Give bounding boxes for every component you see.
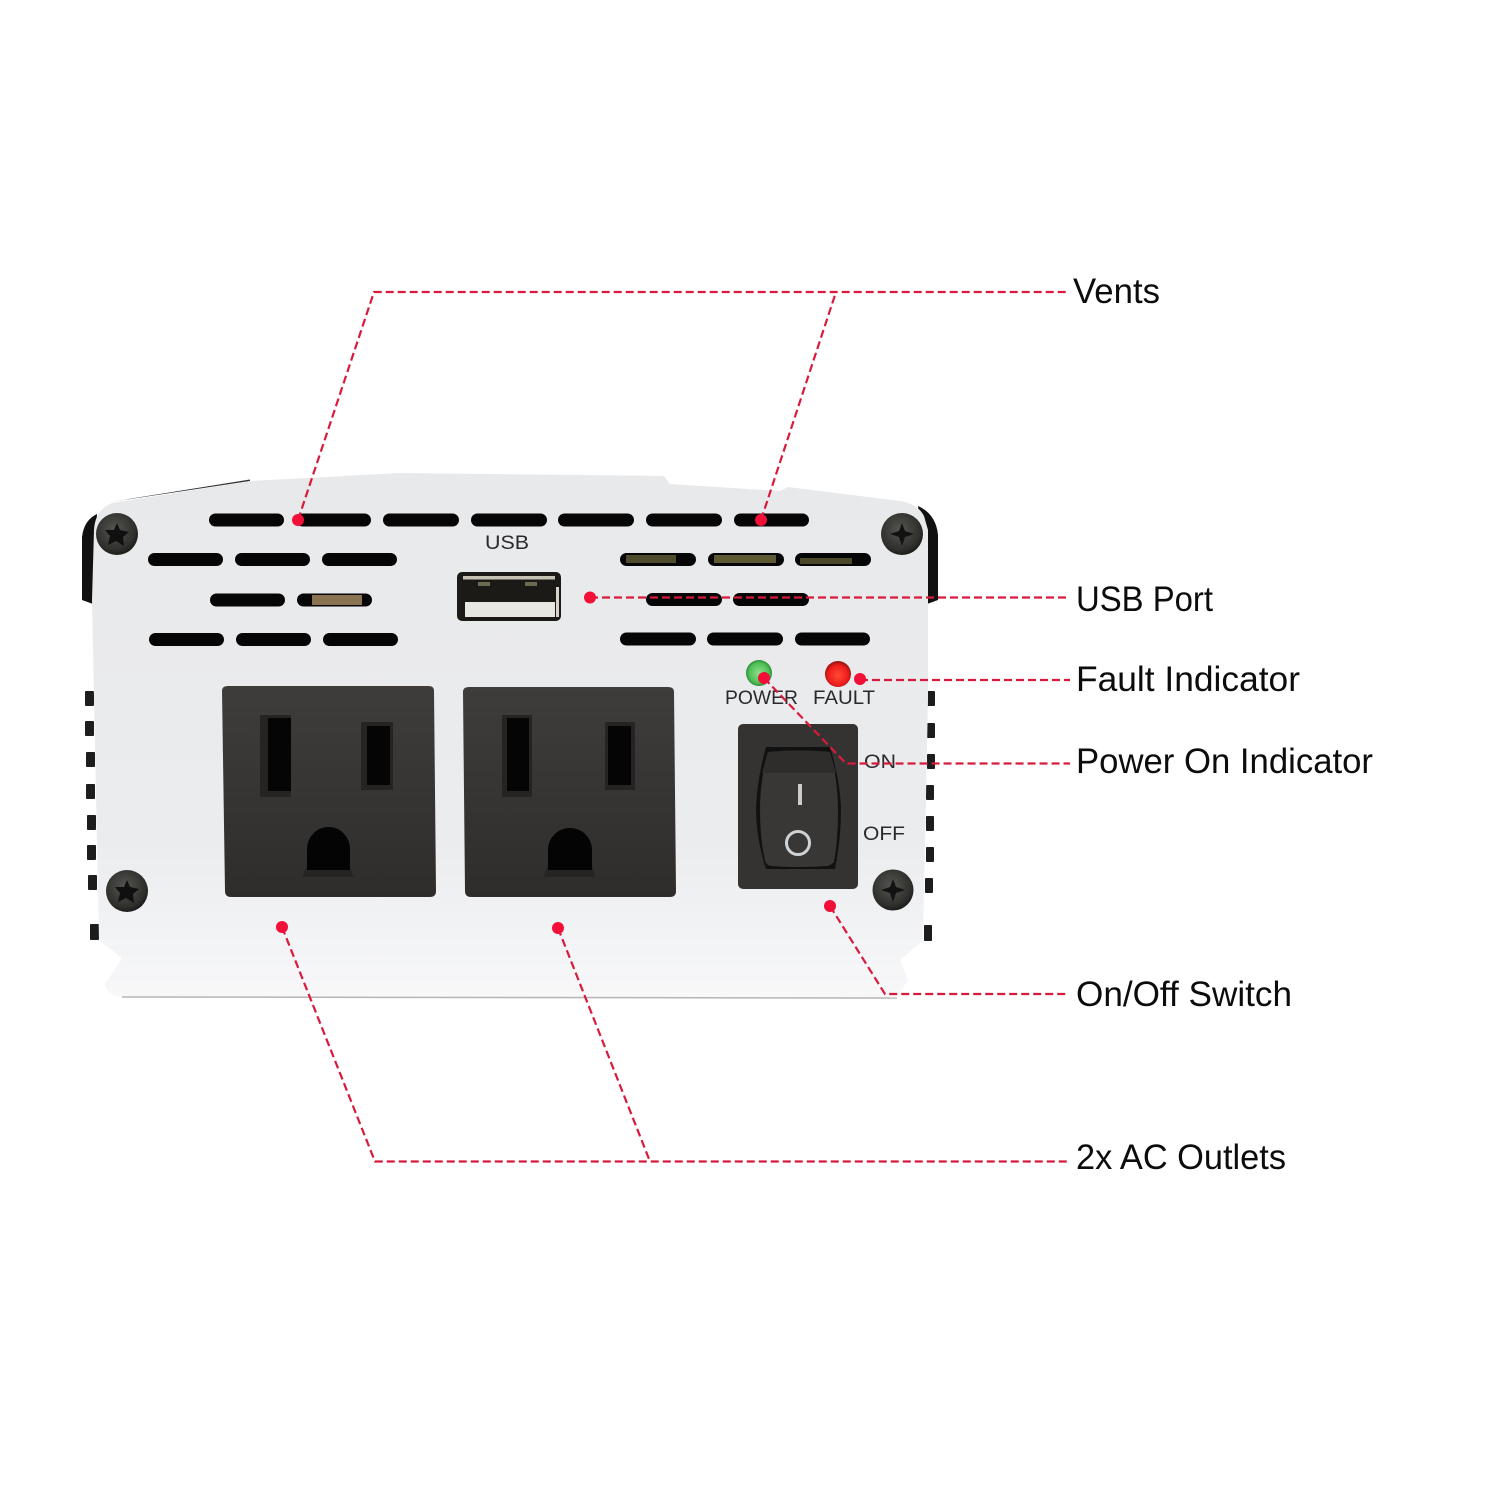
callout: fault indicator: Fault Indicator [1076,660,1300,699]
on/off switch [738,724,905,889]
callout: usb port [584,580,1213,619]
vent slots [148,514,871,646]
callout: ac outlets [276,921,1286,1177]
screws [96,513,923,912]
callout: vents: Vents [1073,272,1160,311]
ac outlet right [463,687,676,897]
side brackets [82,480,938,604]
callout: vents [292,272,1160,526]
callout: ac outlets: 2x AC Outlets [1076,1138,1286,1177]
indicator leds [725,660,875,709]
callout: power on indicator [758,672,1373,781]
callout: on/off switch [824,900,1292,1014]
on/off switch: OFF [863,824,905,845]
on/off switch: ON [864,752,896,773]
usb port: USB [485,533,529,554]
cooling fins [85,691,935,941]
inverter body [82,473,938,998]
indicator leds: POWER [725,688,798,709]
front plate [92,473,928,998]
usb port [457,533,561,621]
ac outlet left [222,686,436,897]
callout: usb port: USB Port [1076,580,1213,619]
callout: fault indicator [854,660,1300,699]
callout: power on indicator: Power On Indicator [1076,742,1373,781]
callout: on/off switch: On/Off Switch [1076,975,1292,1014]
indicator leds: FAULT [813,688,875,709]
